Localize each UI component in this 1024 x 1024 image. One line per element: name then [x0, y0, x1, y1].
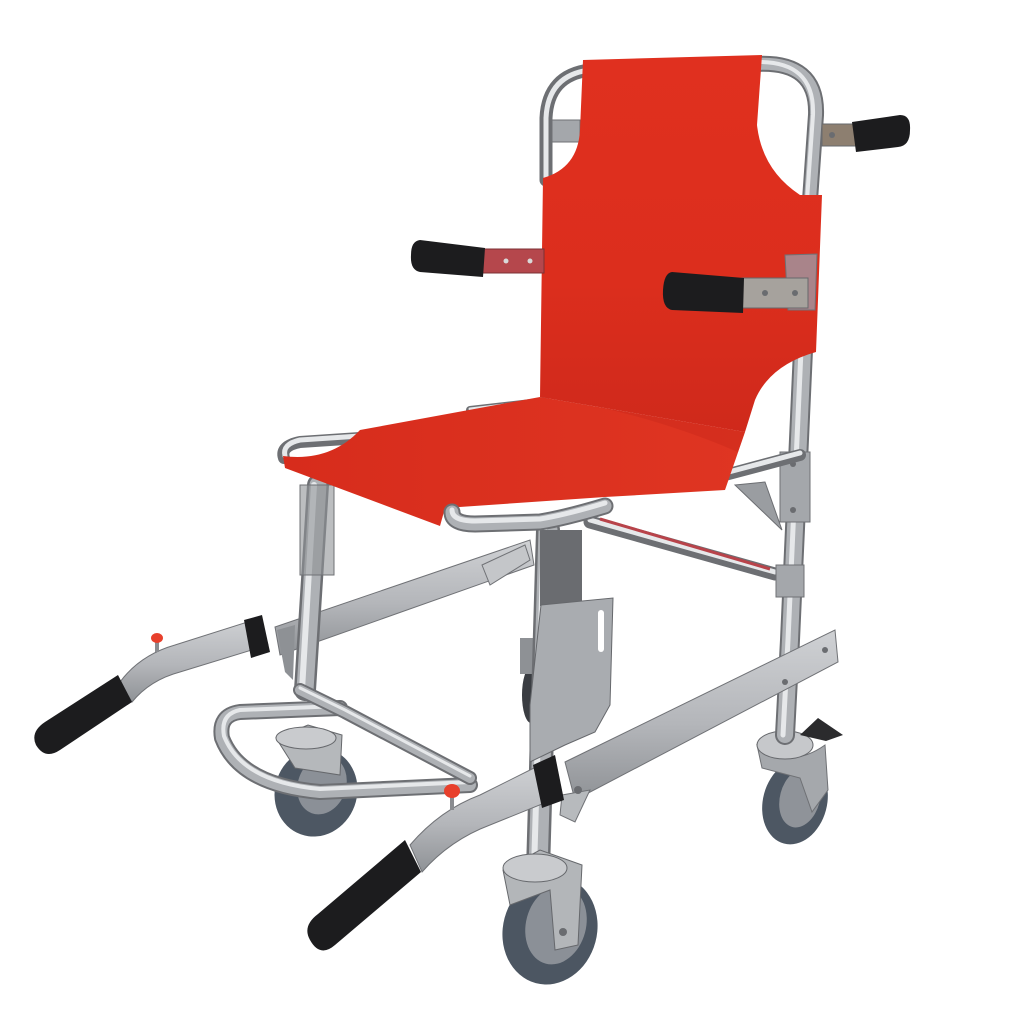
red pin: near rail	[444, 784, 460, 810]
centre front leg and bracket	[530, 530, 613, 870]
front left caster	[276, 725, 342, 775]
red pin: far rail	[151, 633, 163, 652]
rear upright clamps	[735, 452, 810, 597]
strap clip: near rail	[533, 755, 564, 808]
footrest tube	[221, 688, 470, 792]
strap clip: far rail	[244, 615, 270, 658]
rear upright tube	[783, 350, 803, 735]
wheel: right rear	[753, 718, 843, 852]
seat: red fabric	[283, 397, 745, 526]
wheel: front	[490, 850, 610, 995]
front left leg	[277, 485, 334, 690]
side rail: near	[410, 630, 838, 872]
left arm grip	[411, 240, 544, 277]
grip: near handle	[307, 840, 421, 950]
far rear wheel	[520, 638, 540, 723]
seat front tube	[452, 503, 605, 524]
grip: far handle	[34, 675, 132, 754]
cross bar: lower rear	[590, 519, 775, 574]
right arm grip	[663, 254, 817, 313]
backrest frame	[541, 62, 816, 400]
side rail: far	[120, 540, 534, 702]
wheel: left front	[262, 736, 370, 848]
far rear grip and bracket	[552, 115, 910, 152]
backrest: red fabric	[540, 55, 822, 432]
seat frame rear left	[283, 401, 800, 475]
